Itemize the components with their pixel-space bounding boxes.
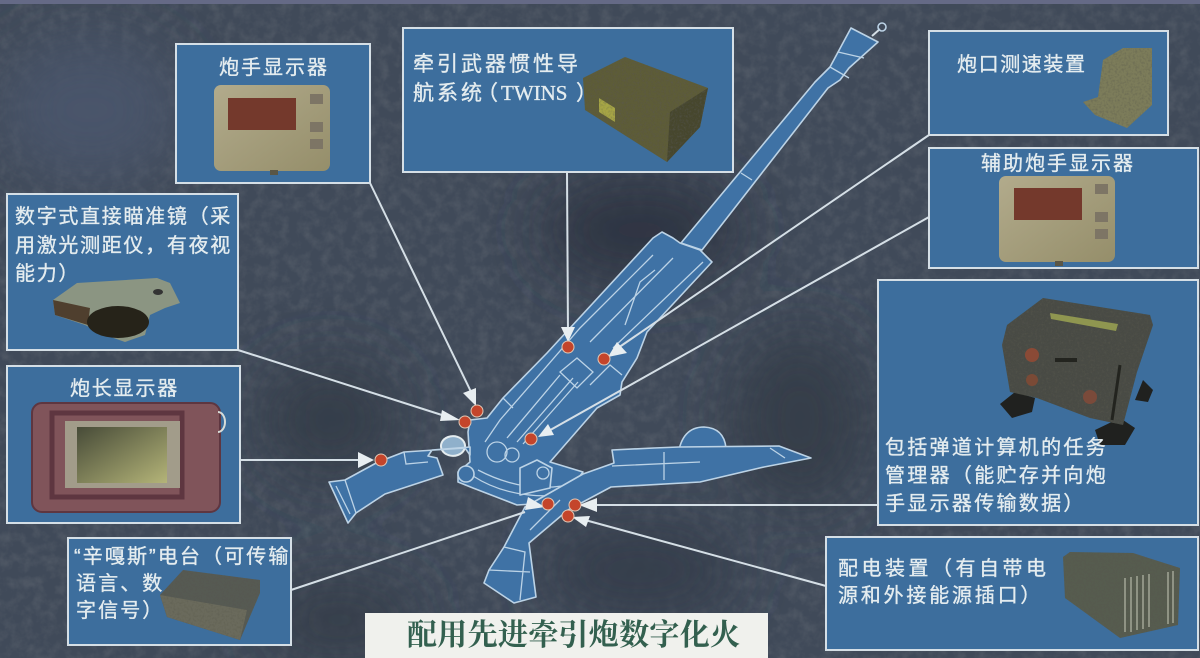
text: TWINS label: ） [576,82,600,105]
icon: digital sight [53,278,180,342]
text: mission manager label: 手显示器传输数据） [885,492,1086,515]
icon: radio set [160,570,260,640]
text: power distribution label: 源和外接能源插口） [838,584,1043,607]
leader lines [238,135,929,590]
text: TWINS label: （ [477,82,501,105]
text: TWINS label: 航系统 [413,82,485,105]
panel: muzzle velocity device [929,31,1168,135]
panel: TWINS navigation system [403,28,733,172]
icon: power distribution box [1063,552,1180,638]
text: digital sight label: 能力） [15,262,80,285]
text: TWINS label: TWINS [501,81,568,105]
panel: gunner display [176,44,370,183]
red markers and arrowheads [358,327,627,527]
icon: commander display unit [32,403,225,512]
heading: muzzle velocity device: 炮口测速装置 [957,53,1087,76]
text: radio label: “辛嘎斯”电台（可传输 [74,546,290,568]
howitzer line drawing [329,23,886,603]
icon: muzzle velocity radar [1083,48,1152,128]
heading: gunner display: 炮手显示器 [219,56,329,79]
heading: commander display: 炮长显示器 [70,377,179,400]
text: radio label: 字信号） [76,599,164,622]
heading: assistant gunner display: 辅助炮手显示器 [981,152,1135,175]
text: digital sight label: 数字式直接瞄准镜（采 [15,206,232,228]
panel: mission manager [878,280,1198,525]
text: power distribution label: 配电装置（有自带电 [838,558,1050,580]
icon: assistant gunner display unit [999,176,1115,266]
panel: SINCGARS radio [68,538,291,645]
text: digital sight label: 用激光测距仪，有夜视 [15,234,232,257]
title: 配用先进牵引炮数字化火 [407,619,740,652]
wheel [678,427,726,455]
text: mission manager label: 管理器（能贮存并向炮 [885,464,1108,487]
right trail [484,427,811,603]
left trail [329,447,470,523]
icon: gunner display unit [214,85,330,175]
panel: commander display [7,366,240,523]
cradle and recoil system [441,232,712,505]
text: mission manager label: 包括弹道计算机的任务 [885,437,1108,459]
panel: digital direct sight [7,194,238,350]
panel: power distribution [826,537,1198,650]
icon: mission manager computer [1000,298,1153,445]
text: radio label: 语言、数 [76,572,164,595]
text: TWINS label: 牵引武器惯性导 [413,53,581,76]
gun barrel [681,23,886,250]
panel: assistant gunner display [929,148,1198,268]
title [365,613,768,658]
icon: inertial navigation box [583,57,708,162]
